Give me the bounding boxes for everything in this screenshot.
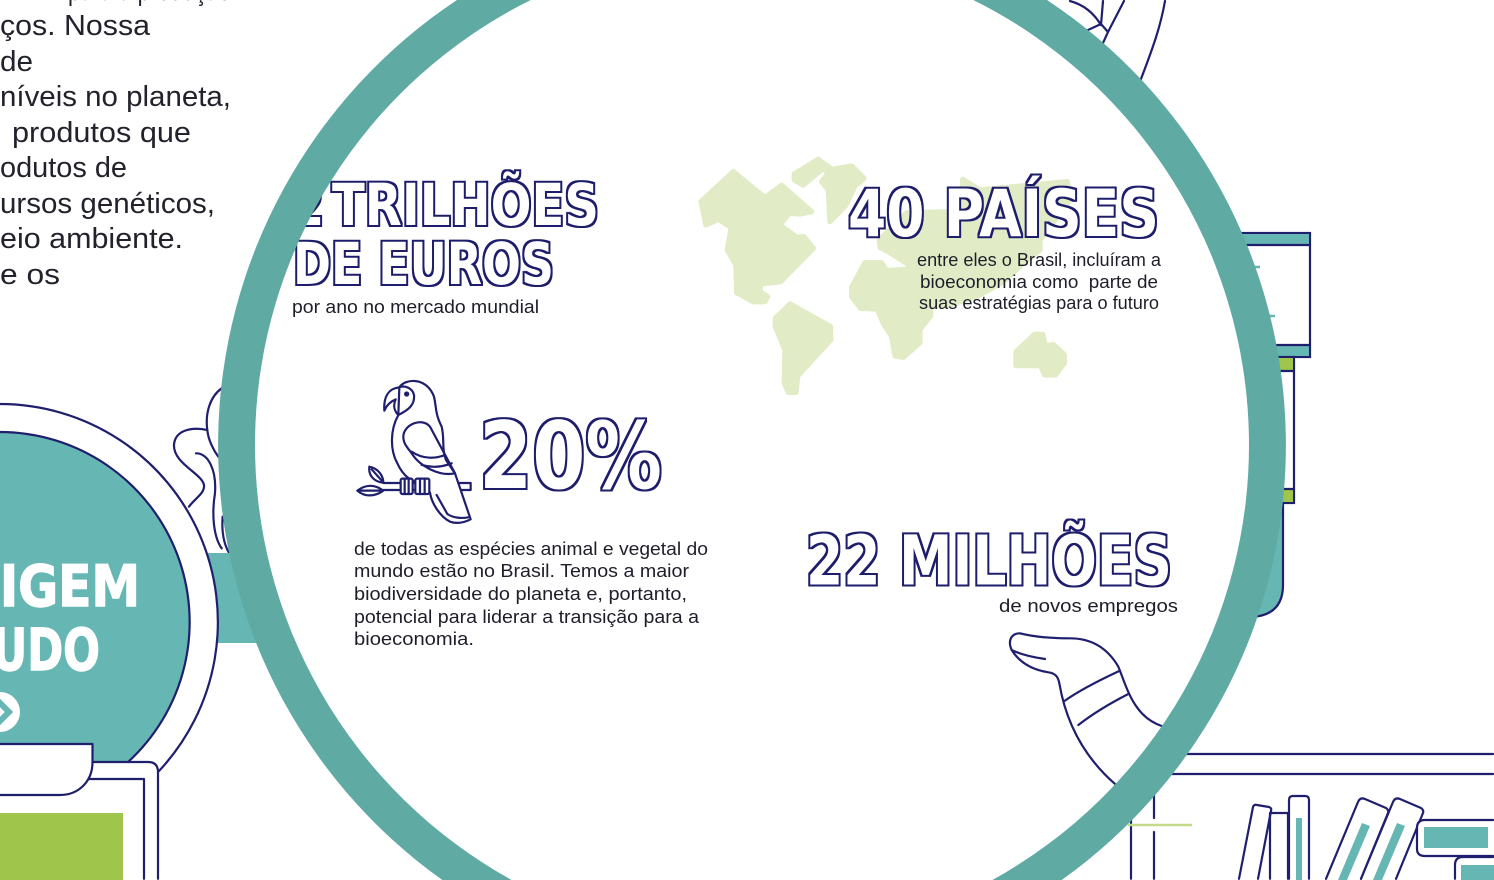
illustration: stacked books on right	[1200, 233, 1310, 617]
stat: 20 percent: 20%	[479, 402, 662, 510]
text block: left paragraph: de	[0, 46, 33, 78]
cta heading	[0, 554, 140, 684]
text block: biodiversity paragraph: bioeconomia.	[354, 629, 474, 649]
stat: 2 trilhões de euros: 2	[293, 171, 324, 239]
text block: biodiversity paragraph: mundo estão no Brasil. Temos a maior	[354, 561, 689, 581]
illustration: steam curves	[174, 388, 229, 553]
text block: biodiversity paragraph: potencial para liderar a transição para a	[354, 607, 700, 627]
stat: 22 milhões: de novos empregos	[999, 596, 1178, 616]
text block: left paragraph: e os	[0, 259, 60, 291]
text block: left paragraph	[0, 0, 231, 291]
stat: 40 países	[848, 174, 1162, 313]
text block: left paragraph: odutos de	[0, 152, 127, 184]
stat: 22 milhões	[806, 520, 1178, 616]
panel: left teal call-to-action circle	[0, 404, 218, 780]
text block: left paragraph: produtos que	[12, 117, 191, 149]
stat: 40 países: 40 PAÍSES	[848, 174, 1159, 252]
stat: 2 trilhões de euros	[292, 170, 599, 317]
illustration: top leaf	[1070, 1, 1165, 79]
stat: 40 países: entre eles o Brasil, incluíram a	[917, 250, 1162, 270]
text block: left paragraph: eio ambiente.	[0, 223, 183, 255]
illustration: bookshelf	[1128, 754, 1494, 880]
cta heading: IGEM	[0, 554, 140, 620]
stat: 40 países: bioeconomia como parte de	[920, 272, 1158, 292]
teal band behind the circle	[205, 553, 275, 643]
stat: 2 trilhões de euros: TRILHÕES	[332, 170, 599, 239]
chart: world map	[701, 159, 1070, 392]
text block: left paragraph: níveis no planeta,	[0, 81, 231, 113]
text block: biodiversity paragraph: de todas as espécies animal e vegetal do	[354, 539, 708, 559]
text block: left paragraph: ursos genéticos,	[0, 188, 215, 220]
panel: white circle interior	[252, 0, 1252, 880]
text block: biodiversity paragraph: biodiversidade do planeta e, portanto,	[354, 584, 687, 604]
text block: biodiversity paragraph	[354, 539, 708, 649]
text block: left paragraph: ços. Nossa	[0, 10, 150, 42]
illustration: toucan beak shape	[1010, 633, 1162, 784]
stat: 40 países: suas estratégias para o futuro	[919, 293, 1159, 313]
icon: arrow button	[0, 692, 20, 732]
icon: parrot on branch	[357, 381, 471, 523]
illustration: monitor frame	[0, 744, 158, 880]
stat: 2 trilhões de euros: DE EUROS	[293, 230, 554, 298]
ring: large teal circle outline	[218, 0, 1286, 880]
stat: 2 trilhões de euros: por ano no mercado mundial	[292, 297, 539, 317]
stat: 22 milhões: 22 MILHÕES	[806, 520, 1172, 602]
